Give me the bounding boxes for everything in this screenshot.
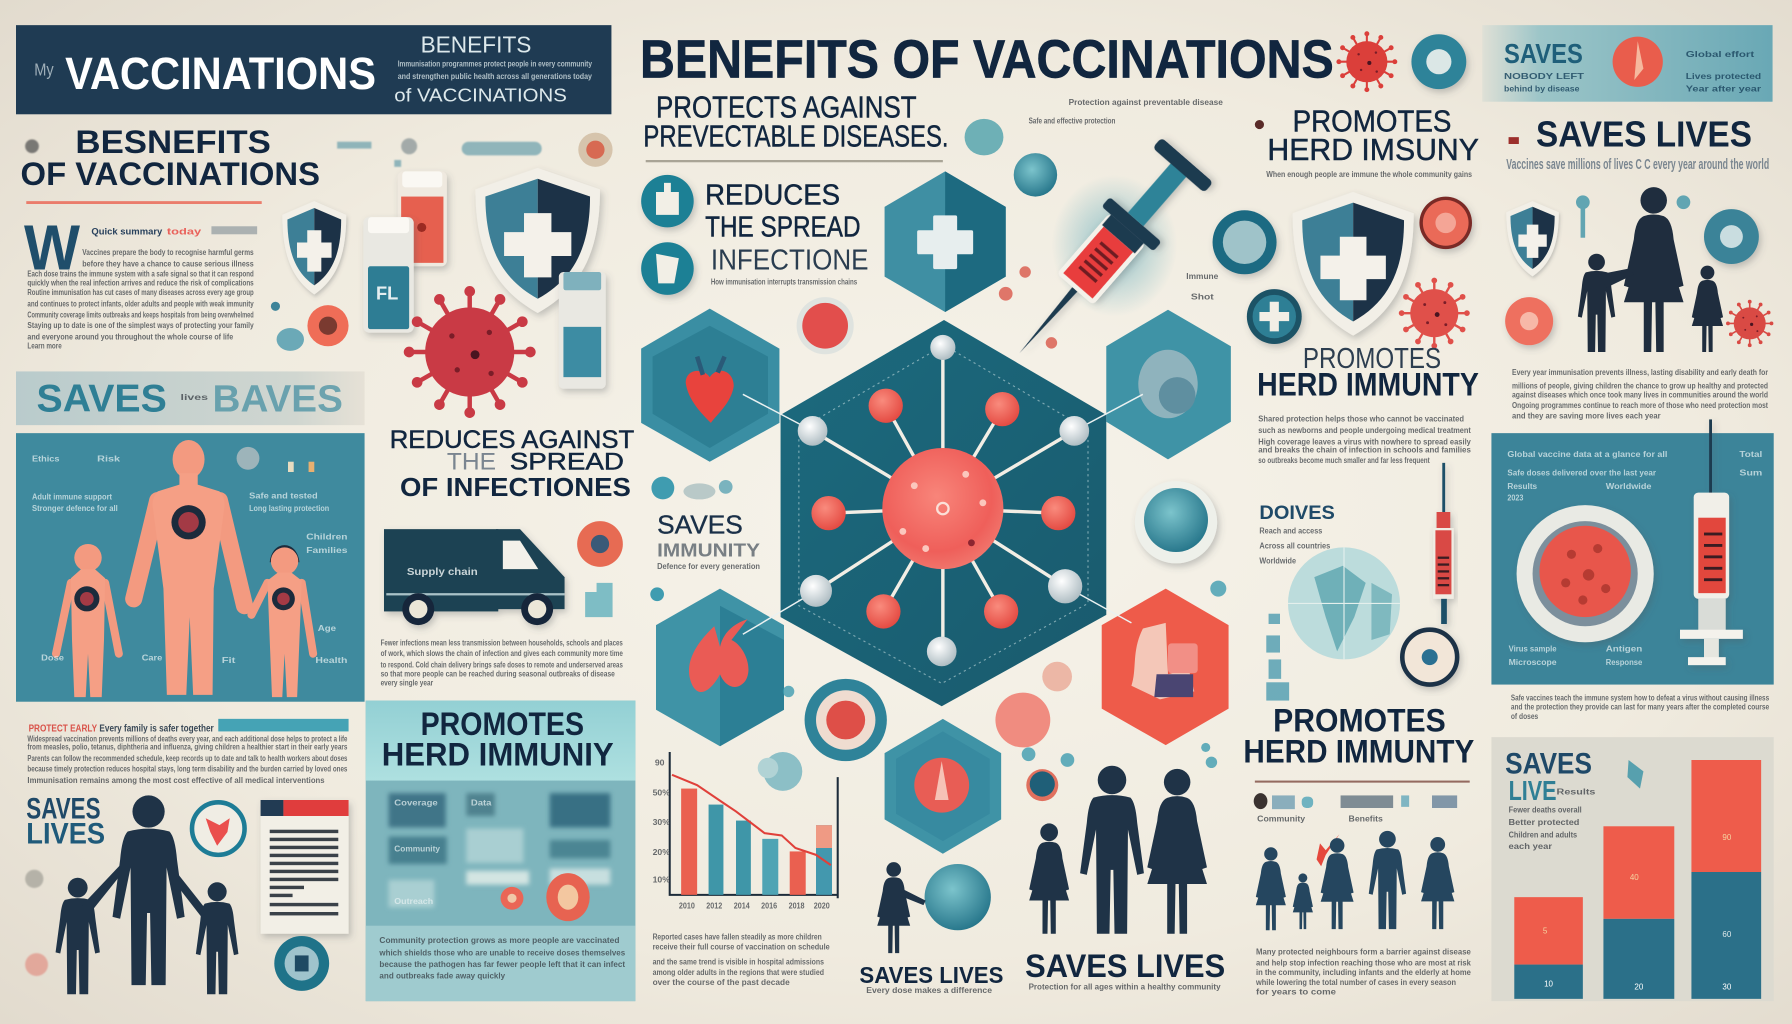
caption text: which shields those who are unable to receive doses themselves xyxy=(379,947,625,957)
body lines xyxy=(1512,367,1768,420)
body text block: Community coverage limits outbreaks and keeps hospitals from being overwhelmed xyxy=(27,310,254,320)
stacked bar 3 xyxy=(1691,760,1761,999)
stacked bar 2: 20 xyxy=(1634,983,1644,992)
body text: because timely protection reduces hospital stays, long term disability and the burden carried by loved ones xyxy=(27,763,348,773)
caption text: and outbreaks fade away quickly xyxy=(379,970,505,980)
central hexagon network xyxy=(743,320,1143,706)
icon: third vial xyxy=(559,272,606,389)
stacked bar 1: 10 xyxy=(1544,979,1554,988)
line two: HERD IMMUNTY xyxy=(1257,366,1479,402)
small lines: Results xyxy=(1557,786,1596,796)
heading: saves: SAVES xyxy=(37,377,167,420)
rule xyxy=(1255,781,1470,783)
garbled word: IMMUNITY xyxy=(657,540,760,561)
stacked bar 3: 90 xyxy=(1722,833,1732,842)
text block: promotes herd immunity (second): PROMOTES xyxy=(1303,343,1441,375)
card: vaccination record xyxy=(261,800,349,934)
decorative icon row xyxy=(25,138,542,167)
panel annotations: Families xyxy=(306,545,348,555)
small labels xyxy=(1504,49,1762,93)
text block: chart caption: and the same trend is visible in hospital admissions xyxy=(653,957,824,967)
icon: shield xyxy=(1293,192,1414,336)
child figure right xyxy=(251,545,313,697)
stacked bar 1 xyxy=(1514,897,1583,999)
icon: white syringe xyxy=(1680,419,1743,665)
mother and children silhouette xyxy=(1578,187,1723,352)
icon: small shield xyxy=(1506,201,1559,276)
panel annotations: Risk xyxy=(97,454,120,464)
stacked bar 2 xyxy=(1603,826,1674,999)
coloured sub-label row xyxy=(91,226,257,236)
small panel text: Sum xyxy=(1739,467,1763,477)
icon: delivery van xyxy=(384,529,565,625)
body lines: Many protected neighbours form a barrier against disease xyxy=(1256,946,1471,956)
small dashboard labels: Coverage xyxy=(394,798,438,808)
caption text: because the pathogen has far fewer people left that it can infect xyxy=(379,959,625,969)
heading: saves: SAVES xyxy=(1505,748,1592,781)
heading: herd immunity: HERD IMMUNIY xyxy=(382,737,614,773)
main title: BENEFITS OF VACCINATIONS xyxy=(640,30,1334,90)
text block: van caption: to respond. Cold chain delivery brings safe doses to remote and underserved areas xyxy=(381,659,623,669)
panel annotations: Stronger defence for all xyxy=(32,503,118,513)
body text block: Staying up to date is one of the simplest ways of protecting your family xyxy=(27,320,254,330)
small labels: Global effort xyxy=(1686,49,1754,59)
white nodes xyxy=(798,335,1089,666)
check mark xyxy=(1317,834,1339,866)
panel: saves lives stacked bars xyxy=(1491,737,1774,1001)
people row xyxy=(1256,831,1454,930)
small lines: Better protected xyxy=(1509,817,1579,827)
icon: top red virus xyxy=(1339,34,1395,90)
fine line: When enough people are immune the whole community gains xyxy=(1266,169,1472,179)
icon: small teal swirls xyxy=(650,477,733,601)
small lines: Children and adults xyxy=(1509,830,1577,840)
text block: reduces the spread: REDUCES xyxy=(705,180,840,212)
icon: teal cup circle xyxy=(641,242,694,295)
fine line under large heading: Protection for all ages within a healthy community xyxy=(1029,982,1221,992)
heading: lives: LIVES xyxy=(26,817,105,850)
heading: DOIVES xyxy=(1259,502,1335,524)
caption text: Community protection grows as more people are vaccinated xyxy=(379,935,619,945)
small panel text: Virus sample xyxy=(1509,643,1557,653)
icon: teal bubble xyxy=(1014,153,1057,197)
small legend row xyxy=(1254,793,1457,809)
top fine text: Protection against preventable disease xyxy=(1069,97,1223,107)
coloured headline row: Every family is safer together xyxy=(99,723,214,734)
small badges xyxy=(237,447,314,472)
teal ornament xyxy=(1576,195,1690,238)
body lines: and breaks the chain of infection in schools and families xyxy=(1258,445,1471,455)
panel: top-right saves band xyxy=(1482,25,1773,102)
icon: red spiky cell xyxy=(577,521,623,567)
heading: SAVES LIVES xyxy=(1536,113,1752,154)
icon: teal plus xyxy=(1247,289,1302,344)
small lines xyxy=(1259,526,1330,565)
top fine text xyxy=(1029,97,1223,125)
text block: reduces the spread xyxy=(705,180,869,287)
panel: global reach xyxy=(1259,463,1457,701)
stacked bar 2: 40 xyxy=(1630,873,1639,882)
chart: declining cases xyxy=(653,752,838,911)
body lines: Shared protection helps those who cannot be vaccinated xyxy=(1258,414,1464,424)
panel annotations: Children xyxy=(306,531,347,541)
icon: child with bubble xyxy=(877,862,991,953)
small labels: NOBODY LEFT xyxy=(1504,71,1585,81)
body lines: so outbreaks become much smaller and far less frequent xyxy=(1258,455,1430,465)
text block: chart caption: among older adults in the regions that were studied xyxy=(653,967,824,977)
panel: saves lives right column xyxy=(1505,113,1771,420)
body text: Widespread vaccination prevents millions of deaths every year, and each additional dose helps to protect a life xyxy=(27,734,348,744)
banner fine print: and strengthen public health across all generations today xyxy=(398,71,592,81)
stacked bar 3: 30 xyxy=(1722,983,1732,992)
panel annotations: Adult immune support xyxy=(32,491,112,501)
text block: chart caption: receive their full course of vaccination on schedule xyxy=(653,942,830,952)
panel: promotes herd immunity xyxy=(366,701,635,1001)
top fine text: Safe and effective protection xyxy=(1029,115,1115,125)
icon: teal bubble with white ring xyxy=(1135,481,1217,563)
red rule xyxy=(26,201,262,204)
panel annotations: Fit xyxy=(222,655,236,665)
red trend line xyxy=(672,775,831,865)
axis labels xyxy=(653,758,830,911)
text block: protects against preventable diseases: PROTECTS AGAINST xyxy=(656,90,917,125)
small dashboard labels xyxy=(394,798,492,906)
heading: saves: SAVES xyxy=(1504,38,1583,69)
icon: delivery van: Supply chain xyxy=(407,567,478,578)
text block: reduces against the spread xyxy=(390,426,634,502)
icon: red cell with ring xyxy=(797,297,854,354)
body lines: in the community, including infants and the elderly at home xyxy=(1256,967,1471,977)
banner heading: vaccinations: VACCINATIONS xyxy=(65,48,376,99)
stacked bar 3: 60 xyxy=(1722,930,1732,939)
icon: top teal circle xyxy=(1411,34,1466,89)
axis labels: 2016 xyxy=(761,901,777,911)
body text block: Vaccines prepare the body to recognise harmful germs xyxy=(82,247,254,257)
icon: magnifier ring xyxy=(1402,630,1457,685)
body lines: such as newborns and people undergoing medical treatment xyxy=(1258,425,1471,435)
body lines: for years to come xyxy=(1256,986,1336,996)
icon: teal vial: FL xyxy=(376,282,398,303)
icon: red circle xyxy=(1505,297,1553,345)
scattered red flecks xyxy=(999,266,1057,349)
red marker xyxy=(1509,137,1519,144)
thin links to outer hexagons xyxy=(743,394,1143,634)
heading: promotes: PROMOTES xyxy=(1293,103,1451,138)
coloured sub-label row: Quick summary xyxy=(91,226,163,236)
icon: large shield xyxy=(475,168,600,313)
icon: teal circle xyxy=(1704,209,1759,264)
heading: garbled lives: BAVES xyxy=(213,377,343,419)
panel annotations xyxy=(32,454,348,665)
central virus xyxy=(882,448,1003,569)
scattered teal specks xyxy=(783,581,1226,768)
small lines: Reach and access xyxy=(1259,526,1322,536)
body text: Immunisation remains among the most cost effective of all medical interventions xyxy=(27,775,325,785)
banner small mark: My xyxy=(34,59,54,79)
axis labels: 2020 xyxy=(814,901,830,911)
bars xyxy=(681,789,832,895)
grey rule xyxy=(646,160,943,162)
tiny label: lives xyxy=(181,392,208,402)
body lines xyxy=(1258,414,1471,465)
axis labels: 30% xyxy=(653,817,670,827)
panel: bottom-left family section xyxy=(25,719,349,994)
heading: live: LIVE xyxy=(1509,775,1557,806)
child figure left xyxy=(56,544,119,697)
heading: herd immunity: HERD IMSUNY xyxy=(1267,132,1479,167)
panel annotations: Health xyxy=(315,655,347,665)
text block: promotes herd immunity (second) xyxy=(1257,343,1479,465)
text block: chart caption: over the course of the past decade xyxy=(653,977,790,987)
axis labels: 10% xyxy=(653,874,670,884)
small dashboard labels: Community xyxy=(394,843,440,853)
icon: red vial xyxy=(398,171,447,266)
icon: pale red virus xyxy=(995,693,1050,747)
small note near syringe: Shot xyxy=(1191,291,1214,301)
family silhouette: man, woman, child xyxy=(1029,766,1207,934)
body text block: before they have a chance to cause serious illness xyxy=(82,258,254,268)
fine line under small heading: Every dose makes a difference xyxy=(866,985,992,995)
heading: saves lives small: SAVES LIVES xyxy=(859,962,1003,988)
dashboard tiles xyxy=(389,793,610,907)
text block: promotes herd immunity (third): PROMOTES xyxy=(1273,702,1446,738)
small panel text xyxy=(1507,449,1763,667)
panel: virus and syringe teal xyxy=(1491,419,1774,685)
body lines: High coverage leaves a virus with nowhere to spread easily xyxy=(1258,437,1471,447)
icon: globe xyxy=(1288,547,1400,659)
text block: van caption: so that more people can be reached during seasonal outbreaks of disease xyxy=(381,669,615,679)
body text block: quickly when the real infection arrives and reduce the risk of complications xyxy=(27,278,254,288)
text block: van caption: every single year xyxy=(381,678,434,688)
hexagon: left heart xyxy=(641,309,779,462)
panel: top-left title banner xyxy=(16,25,611,114)
icon: teal vial xyxy=(363,217,414,333)
bullet marker xyxy=(1255,120,1264,129)
heading line two: OF VACCINATIONS xyxy=(21,156,320,192)
small lines: Benefits xyxy=(1349,814,1383,824)
small dashboard labels: Outreach xyxy=(394,896,433,906)
hexagon: bottom organ xyxy=(885,719,1001,854)
banner sub-heading: benefits: BENEFITS xyxy=(421,32,531,58)
coloured sub-label row: today xyxy=(167,226,202,236)
icon: syringe xyxy=(994,137,1213,376)
icon: red sphere xyxy=(1613,37,1663,87)
icon: teal circle partial xyxy=(1213,210,1277,274)
body text block: Routine immunisation has cut cases of many diseases across every age group xyxy=(27,287,254,297)
body text: from measles, polio, tetanus, diphtheria and influenza, giving children a healthier start in their early years xyxy=(27,742,348,752)
panel: promotes herd immunity column xyxy=(1213,103,1479,346)
hexagon: right lungs xyxy=(1106,310,1231,459)
icon: teal swirl xyxy=(758,752,802,791)
panel annotations: Age xyxy=(318,623,336,633)
hexagon: lower-right coral organ xyxy=(1102,589,1229,745)
panel: teal human figures xyxy=(16,433,365,702)
icon: pale teal cell xyxy=(965,119,1003,155)
small note near syringe: Immune xyxy=(1186,271,1218,281)
icon: virus dish xyxy=(1517,505,1654,642)
small panel text: Global vaccine data at a glance for all xyxy=(1507,449,1667,459)
small panel text: Results xyxy=(1507,481,1537,491)
text block: promotes herd immunity (third) xyxy=(1243,702,1474,996)
body lines: and help stop infection reaching those who are most at risk xyxy=(1256,958,1471,968)
body lines xyxy=(1255,946,1471,996)
small panel text: Total xyxy=(1739,449,1762,459)
connector lines xyxy=(813,346,1074,651)
axis labels: 50% xyxy=(653,787,670,797)
panel annotations: Ethics xyxy=(32,454,60,464)
small labels: behind by disease xyxy=(1504,83,1580,93)
small teal leaf xyxy=(1627,760,1643,789)
body text block: and continues to protect infants, older adults and people with weak immunity xyxy=(27,298,254,308)
body lines: and they are saving more lives each year xyxy=(1512,410,1661,420)
text block: syringe caption: of doses xyxy=(1511,711,1538,721)
heading: saves lives large: SAVES LIVES xyxy=(1025,948,1225,984)
second line: PREVECTABLE DISEASES. xyxy=(643,118,949,153)
small side marks xyxy=(25,870,48,976)
fine line: How immunisation interrupts transmission chains xyxy=(711,277,857,287)
small panel text: 2023 xyxy=(1507,493,1524,503)
icon: ringed cell xyxy=(805,679,887,761)
small note near syringe xyxy=(1186,271,1218,301)
body text block: Each dose trains the immune system with a safe signal so that it can respond xyxy=(27,269,254,279)
icon: small shield xyxy=(282,201,346,295)
heading: saves lives: SAVES xyxy=(26,792,101,825)
icon: red virus xyxy=(1402,281,1467,346)
axis labels: 2010 xyxy=(679,901,695,911)
small labels: Lives protected xyxy=(1686,71,1761,81)
hexagon: top medical cross xyxy=(885,171,1006,312)
icon: red cells xyxy=(501,873,590,921)
small labels: Year after year xyxy=(1686,83,1762,93)
family silhouette xyxy=(56,795,238,994)
small lines: Community xyxy=(1257,814,1305,824)
body text block: and everyone around you throughout the whole course of life xyxy=(27,331,233,341)
icon: vertical syringe xyxy=(1433,463,1454,624)
text block: chart caption xyxy=(653,931,830,987)
line two: HERD IMMUNTY xyxy=(1243,733,1474,769)
small panel text: Worldwide xyxy=(1606,481,1652,491)
coloured headline row: PROTECT EARLY xyxy=(29,723,97,734)
small lines: Across all countries xyxy=(1259,541,1330,551)
heading: besnefits of vaccinations: BESNEFITS xyxy=(75,124,271,160)
line two: THE SPREAD xyxy=(705,212,861,244)
small lines xyxy=(1509,786,1596,851)
panel annotations: Long lasting protection xyxy=(249,503,329,513)
small panel text: Response xyxy=(1606,657,1642,667)
panel annotations: Dose xyxy=(41,653,64,663)
small panel text: Microscope xyxy=(1509,657,1557,667)
icon: medal top right xyxy=(578,133,613,167)
icon: glossy bead xyxy=(1026,769,1058,801)
body lines: while lowering the total number of cases in every season xyxy=(1255,977,1456,987)
heading: promotes: PROMOTES xyxy=(421,706,584,742)
icon: syringe glow xyxy=(1051,175,1177,317)
panel: saves lives band xyxy=(16,371,365,425)
small panel text: Safe doses delivered over the last year xyxy=(1507,467,1657,477)
icon: teal hand-wash circle xyxy=(641,175,694,227)
banner sub-heading: of vaccinations: of VACCINATIONS xyxy=(394,85,567,106)
axis labels: 20% xyxy=(653,847,670,857)
text block: saves immunity xyxy=(657,510,760,571)
icon: heart badge xyxy=(192,802,245,855)
adult figure xyxy=(134,440,245,695)
axis labels: 2012 xyxy=(706,901,722,911)
word: of infectiones: OF INFECTIONES xyxy=(400,472,631,502)
body text: Parents can follow the recommended schedule, keep records up to date and talk to health workers about doses xyxy=(27,753,348,763)
icon: red virus xyxy=(1728,302,1771,345)
icon: small red cell xyxy=(307,305,349,346)
fine print: Defence for every generation xyxy=(657,561,760,571)
small dashboard labels: Data xyxy=(471,798,492,808)
text block: van caption xyxy=(381,638,623,688)
axes xyxy=(670,752,838,898)
icon: round seal xyxy=(274,936,329,991)
faded word: the: THE xyxy=(447,449,496,476)
icon: teal droplet xyxy=(271,302,304,351)
panel annotations: Safe and tested xyxy=(249,490,318,500)
small lines: Fewer deaths overall xyxy=(1509,805,1582,815)
text block: reduces against the spread: REDUCES AGAINST xyxy=(390,426,634,454)
small lines xyxy=(1257,814,1383,824)
small lines: Worldwide xyxy=(1259,555,1296,565)
banner fine print: Immunisation programmes protect people in every community xyxy=(398,58,592,68)
word: spread: SPREAD xyxy=(510,449,624,476)
small panel text: Antigen xyxy=(1606,643,1642,653)
red nodes xyxy=(811,389,1075,629)
small lines: each year xyxy=(1509,841,1553,851)
icon: dark red virus xyxy=(409,291,530,413)
body text block xyxy=(27,247,254,351)
hexagon: lower-left organ xyxy=(656,589,784,746)
panel annotations: Care xyxy=(142,653,162,663)
axis labels: 2018 xyxy=(789,901,805,911)
axis labels: 2014 xyxy=(734,901,750,911)
icon: red button xyxy=(1419,197,1472,249)
banner fine print xyxy=(398,58,592,81)
stacked bar 1: 5 xyxy=(1543,927,1548,936)
body text xyxy=(27,734,348,785)
text block: syringe caption xyxy=(1511,693,1769,721)
coloured headline row xyxy=(29,719,349,734)
icons: side glyphs xyxy=(1266,614,1289,701)
icon: small red-white cell xyxy=(1042,662,1072,691)
body text block: Learn more xyxy=(27,341,62,351)
text block: van caption: Fewer infections mean less transmission between households, schools and places xyxy=(381,638,623,648)
text block: protects against preventable diseases xyxy=(643,90,949,162)
text block: saves immunity: SAVES xyxy=(657,510,743,540)
text block: chart caption: Reported cases have fallen steadily as more children xyxy=(653,931,822,941)
caption text xyxy=(379,935,625,980)
icon: teal block xyxy=(585,583,613,617)
text block: van caption: of work, which slows the chain of infection and gives each community more time xyxy=(381,648,623,658)
line three: INFECTIONE xyxy=(711,245,869,277)
panel: benefits of vaccinations (left) xyxy=(21,124,613,413)
drop cap W: W xyxy=(24,212,81,284)
axis labels: 90 xyxy=(655,758,665,768)
